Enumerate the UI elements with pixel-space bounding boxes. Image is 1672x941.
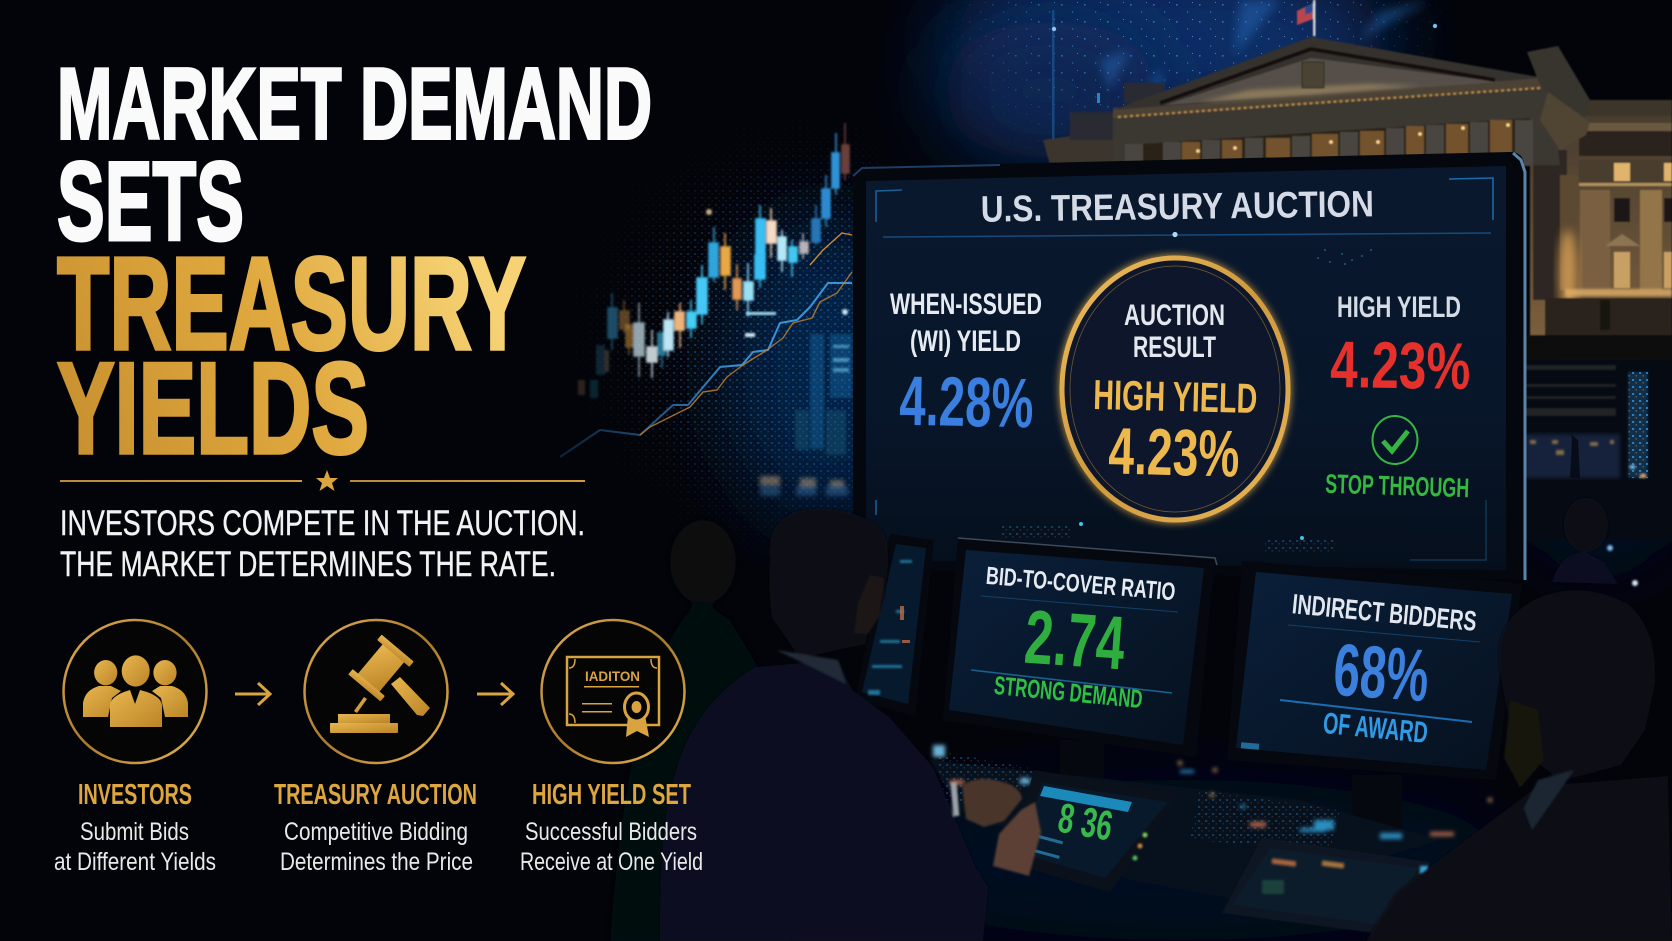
icon: flag bbox=[1297, 0, 1316, 36]
screen title: U.S. TREASURY AUCTION bbox=[981, 183, 1374, 230]
treasury building bbox=[1043, 0, 1672, 360]
icon: people bbox=[83, 655, 188, 727]
metric: when-issued yield: WHEN-ISSUED bbox=[890, 288, 1042, 321]
background trader left bbox=[610, 520, 790, 941]
panel: side monitor bbox=[855, 534, 934, 716]
pediment bbox=[1113, 37, 1544, 110]
panel: main auction monitor bbox=[853, 152, 1525, 580]
panel: indirect bidders monitor: 68% bbox=[1331, 628, 1432, 717]
tablet centre: 8 36 bbox=[1055, 794, 1116, 850]
trader right bbox=[1366, 590, 1672, 941]
metric: when-issued yield bbox=[890, 288, 1042, 442]
icon: certificate: IADITON bbox=[585, 668, 640, 684]
arrow bbox=[477, 683, 513, 705]
right side city backdrop bbox=[1524, 360, 1672, 586]
metric: high yield: 4.23% bbox=[1330, 327, 1471, 403]
icon: certificate bbox=[567, 657, 659, 737]
label: investors bbox=[54, 779, 216, 876]
columns shadow and lights bbox=[1125, 118, 1530, 165]
title: YIELDS bbox=[57, 335, 369, 481]
subtitle: INVESTORS COMPETE IN THE AUCTION. bbox=[60, 504, 585, 543]
label: treasury auction: Competitive Bidding bbox=[284, 818, 468, 846]
tablet centre bbox=[1009, 770, 1180, 892]
data city bbox=[596, 141, 878, 535]
panel: bid-to-cover monitor: STRONG DEMAND bbox=[993, 670, 1144, 714]
label: treasury auction: Determines the Price bbox=[280, 848, 473, 876]
label: high yield set bbox=[520, 779, 703, 876]
subtitle: THE MARKET DETERMINES THE RATE. bbox=[60, 545, 556, 584]
auction result ring bbox=[1062, 258, 1288, 520]
background trader right bbox=[1552, 498, 1638, 586]
label: investors: Submit Bids bbox=[80, 818, 189, 846]
auction result ring: HIGH YIELD bbox=[1093, 371, 1258, 422]
auction result ring: RESULT bbox=[1133, 331, 1216, 364]
hands bbox=[962, 779, 1022, 827]
panel: indirect bidders monitor: OF AWARD bbox=[1322, 707, 1429, 750]
building lower shade bbox=[1525, 335, 1672, 360]
icon: gavel bbox=[330, 635, 430, 733]
divider with star bbox=[60, 470, 585, 491]
monitor screen bbox=[866, 166, 1506, 570]
line chart bbox=[560, 233, 852, 457]
auction result ring: 4.23% bbox=[1108, 413, 1240, 491]
stands and console bbox=[930, 740, 1492, 900]
arrow bbox=[235, 683, 270, 705]
step: treasury auction bbox=[304, 620, 448, 763]
candlestick chart bbox=[578, 123, 849, 398]
auction result ring: AUCTION bbox=[1124, 299, 1225, 332]
panel: bid-to-cover monitor: BID-TO-COVER RATIO bbox=[985, 562, 1177, 606]
label: high yield set: Successful Bidders bbox=[525, 818, 697, 846]
panel: bid-to-cover monitor bbox=[943, 538, 1217, 757]
label: high yield set: Receive at One Yield bbox=[520, 848, 703, 876]
metric: when-issued yield: (WI) YIELD bbox=[910, 325, 1021, 358]
label: treasury auction: TREASURY AUCTION bbox=[274, 779, 477, 811]
left wing bbox=[1043, 130, 1120, 165]
subtitle bbox=[60, 504, 585, 584]
trader centre bbox=[660, 509, 1041, 941]
metric: when-issued yield: 4.28% bbox=[899, 362, 1034, 442]
step: high yield set bbox=[542, 620, 684, 763]
step: investors bbox=[64, 620, 206, 763]
panel: bid-to-cover monitor: 2.74 bbox=[1022, 595, 1128, 686]
main entablature bbox=[1113, 78, 1560, 165]
metric: high yield: HIGH YIELD bbox=[1337, 291, 1461, 324]
metric: high yield: STOP THROUGH bbox=[1325, 469, 1470, 503]
label: investors: at Different Yields bbox=[54, 848, 216, 876]
panel: indirect bidders monitor bbox=[1227, 561, 1522, 780]
title bbox=[57, 48, 652, 481]
metric: high yield bbox=[1325, 291, 1471, 503]
divider rule bbox=[883, 233, 1491, 237]
label: treasury auction bbox=[274, 779, 477, 876]
panel: indirect bidders monitor: INDIRECT BIDDERS bbox=[1291, 588, 1478, 637]
monitor bezel bbox=[853, 152, 1524, 580]
icon: check circle bbox=[1372, 416, 1418, 464]
right wing facade bbox=[1530, 100, 1672, 335]
title: MARKET DEMAND bbox=[57, 48, 652, 160]
label: high yield set: HIGH YIELD SET bbox=[532, 779, 691, 811]
tablet right bbox=[1222, 838, 1430, 935]
label: investors: INVESTORS bbox=[78, 779, 192, 811]
star-field nebula bbox=[939, 0, 1446, 142]
title: TREASURY bbox=[57, 230, 526, 377]
title: SETS bbox=[57, 139, 244, 264]
